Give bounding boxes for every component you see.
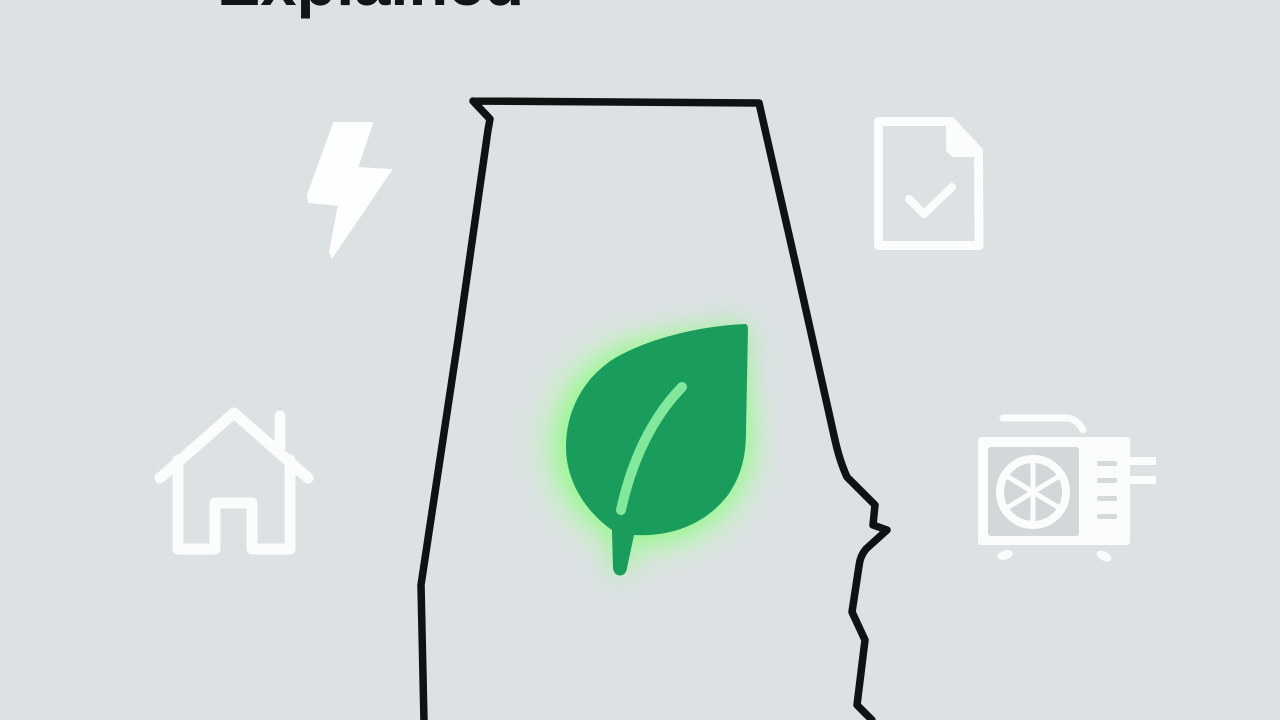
icon: green leaf <box>510 305 790 585</box>
state outline <box>421 101 887 720</box>
icon: house <box>160 413 308 549</box>
icon: air conditioner unit <box>978 418 1156 563</box>
icon: lightning bolt <box>308 123 391 257</box>
icon: document with check <box>878 122 979 246</box>
